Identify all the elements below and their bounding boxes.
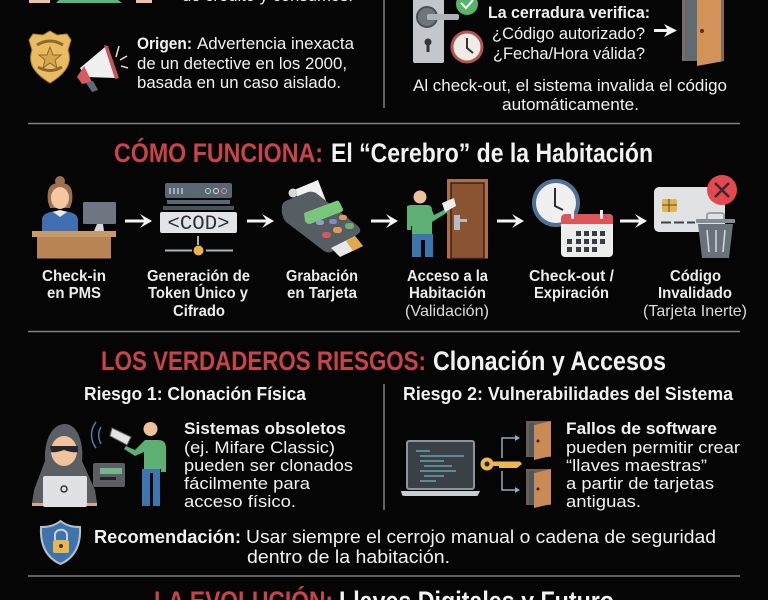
- text: risk 1 detail: Sistemas obsoletos: [184, 419, 346, 438]
- text: origin: [137, 34, 355, 92]
- icon: shield with padlock: [41, 521, 80, 564]
- icon: guest at door: [407, 179, 488, 258]
- text: risk 2 detail: [566, 419, 740, 511]
- heading: risk 2: Riesgo 2: Vulnerabilidades del Sistema: [403, 384, 734, 404]
- arrow: step 3 to 4: [371, 214, 398, 228]
- text: risk 2 detail: a partir de tarjetas: [566, 474, 714, 493]
- icon: green check: [456, 0, 478, 15]
- heading: real risks: LOS VERDADEROS RIESGOS:: [101, 346, 426, 376]
- label: invalid code: [643, 268, 747, 320]
- label: check-out: Expiración: [534, 285, 609, 302]
- text: check-out note: [413, 76, 727, 114]
- icon: server with code: <COD>: [168, 213, 230, 236]
- step 4: room access: [405, 179, 489, 320]
- text: risk 2 detail: Fallos de software: [566, 419, 717, 438]
- label: check-in: Check-in: [42, 268, 106, 285]
- step 2: token generation: [147, 183, 250, 320]
- panel: lock verification: [413, 0, 727, 114]
- text: recommendation: Usar siempre el cerrojo manual o cadena de seguridad: [246, 527, 716, 547]
- text: lock questions: La cerradura verifica:: [488, 3, 650, 22]
- step 6: invalid code: [643, 175, 747, 320]
- text: recommendation: [94, 527, 716, 567]
- icon: master key and routes: [480, 435, 522, 493]
- text: origin: Origen:: [137, 34, 192, 53]
- label: check-out: [529, 268, 615, 302]
- icon: laptop with code: [401, 441, 480, 496]
- panel: myth and origin: [29, 0, 355, 92]
- label: token generation: Generación de: [147, 268, 250, 285]
- text: recommendation: Recomendación:: [94, 527, 241, 547]
- text: check-out note: automáticamente.: [502, 95, 639, 114]
- label: token generation: [147, 268, 250, 320]
- icon: hacker cloning card: [32, 422, 166, 507]
- step 1: check-in: [32, 176, 116, 302]
- label: token generation: Cifrado: [173, 303, 225, 320]
- heading: risk 1: Riesgo 1: Clonación Física: [84, 384, 307, 404]
- text: risk 1 detail: acceso físico.: [184, 492, 296, 511]
- step 3: card encoding: [282, 180, 363, 302]
- label: invalid code: Invalidado: [658, 285, 732, 302]
- panel: risk 2: [401, 384, 740, 511]
- heading: how it works: CÓMO FUNCIONA:: [114, 137, 323, 168]
- panel: recommendation: [41, 521, 716, 567]
- label: card encoding: en Tarjeta: [287, 285, 357, 302]
- text: risk 1 detail: fácilmente para: [184, 474, 311, 493]
- label: card encoding: [286, 268, 358, 302]
- icon: clock and calendar: [534, 181, 613, 257]
- label: room access: [405, 268, 489, 320]
- heading: how it works: El “Cerebro” de la Habitación: [331, 138, 653, 168]
- icon: megaphone: [77, 45, 128, 92]
- label: token generation: Token Único y: [148, 283, 248, 302]
- label: room access: Acceso a la: [407, 268, 488, 285]
- icon: open door: [682, 0, 724, 66]
- icon: cancelled card in bin: [654, 175, 737, 258]
- icon: receptionist at desk: [32, 176, 116, 258]
- icon: door lock plate: [413, 0, 459, 63]
- icon: detective badge: [29, 31, 71, 83]
- label: card encoding: Grabación: [286, 268, 358, 285]
- text: risk 1 detail: (ej. Mifare Classic): [184, 438, 335, 457]
- label: check-in: [42, 268, 106, 302]
- icon: cropped illustration of card and person: [29, 0, 152, 3]
- step 5: check-out: [529, 181, 615, 302]
- arrow: step 2 to 3: [247, 214, 274, 228]
- label: room access: (Validación): [405, 303, 489, 320]
- text: origin: de un detective en los 2000,: [137, 54, 347, 73]
- label: room access: Habitación: [409, 285, 486, 302]
- text: lock questions: ¿Código autorizado?: [492, 24, 645, 43]
- process flow: [32, 175, 747, 320]
- icon: clock: [452, 32, 482, 62]
- text: check-out note: Al check-out, el sistema invalida el código: [413, 76, 727, 95]
- text: risk 1 detail: pueden ser clonados: [184, 456, 353, 475]
- arrow: step 1 to 2: [125, 214, 152, 228]
- text: risk 2 detail: “llaves maestras”: [566, 456, 707, 475]
- text: lock questions: ¿Fecha/Hora válida?: [493, 44, 645, 63]
- label: check-in: en PMS: [47, 285, 101, 302]
- text: lock questions: [488, 3, 650, 63]
- label: invalid code: Código: [670, 268, 721, 285]
- heading: real risks: Clonación y Accesos: [433, 346, 666, 376]
- panel: risk 1: [32, 384, 353, 511]
- text: risk 2 detail: antiguas.: [566, 492, 641, 511]
- arrow: to door: [654, 24, 677, 37]
- text: origin: Advertencia inexacta: [197, 34, 355, 53]
- text: recommendation: dentro de la habitación.: [247, 547, 450, 567]
- label: check-out: Check-out /: [529, 268, 615, 285]
- text: origin: basada en un caso aislado.: [137, 73, 341, 92]
- label: invalid code: (Tarjeta Inerte): [643, 303, 747, 320]
- icon: two open doors: [526, 421, 551, 508]
- icon: card terminal: [282, 180, 363, 257]
- text: risk 1 detail: [184, 419, 353, 511]
- text: risk 2 detail: pueden permitir crear: [566, 438, 740, 457]
- arrow: step 5 to 6: [620, 214, 647, 228]
- arrow: step 4 to 5: [497, 214, 524, 228]
